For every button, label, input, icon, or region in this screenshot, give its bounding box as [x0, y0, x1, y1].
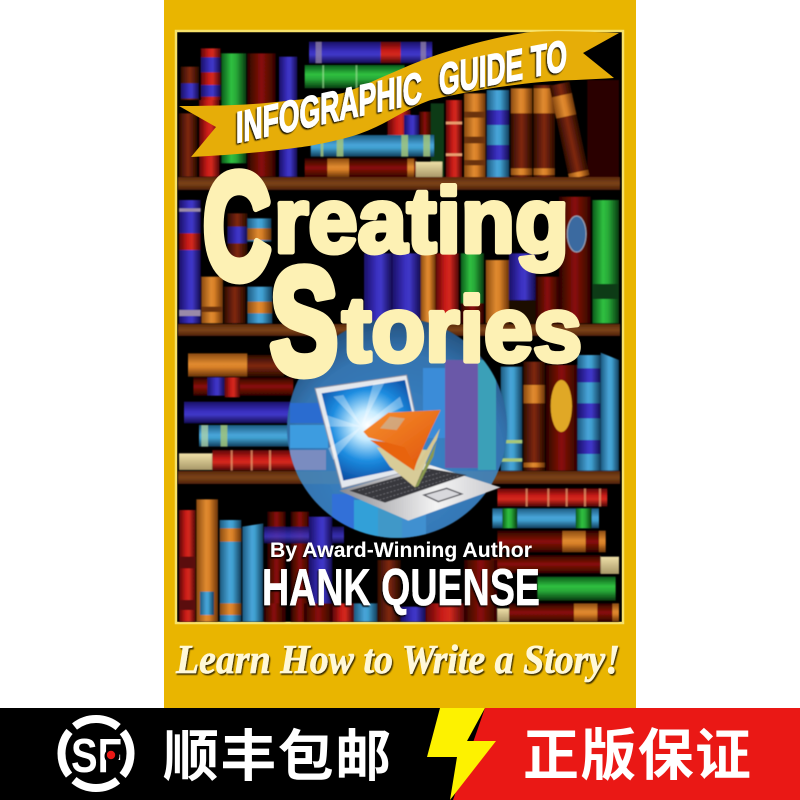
stacked books — [363, 410, 441, 487]
author byline: By Award-Winning Author — [270, 538, 533, 562]
icon: lightning bolt — [427, 708, 496, 800]
banner words: GUIDE TO: GUIDE TO — [439, 31, 567, 105]
ghosted books seen through disc — [290, 360, 504, 545]
author name: HANK QUENSE — [262, 559, 540, 617]
title line: Creating: C — [203, 142, 271, 310]
banner words: INFOGRAPHIC: INFOGRAPHIC — [236, 64, 422, 153]
promo strip: red guarantee band — [453, 708, 800, 800]
blue disc — [287, 318, 507, 538]
shipping label: 顺丰包邮 — [163, 712, 391, 793]
middle shelf row books — [179, 197, 619, 323]
tagline: Learn How to Write a Story! — [175, 636, 620, 682]
icon: SF logo: SF — [71, 730, 122, 783]
title: Creating Stories — [203, 142, 582, 405]
screen rays — [326, 382, 403, 460]
laptop screen — [315, 375, 427, 488]
guarantee label: 正版保证 — [523, 711, 751, 792]
bottom shelf row books — [179, 488, 619, 622]
banner ribbon — [179, 31, 619, 157]
icon: SF logo — [47, 705, 145, 800]
laptop keyboard — [349, 468, 467, 503]
title line: Creating: reating — [274, 170, 569, 272]
laptop base — [339, 465, 501, 521]
top shelf row books — [179, 42, 619, 180]
title line: Creating — [203, 142, 569, 310]
book cover — [164, 0, 636, 708]
bookshelf illustration — [178, 42, 620, 622]
promo strip: black shipping band — [0, 708, 800, 800]
title line: Stories: tories — [342, 279, 582, 381]
wooden shelves — [178, 177, 620, 484]
laptop touchpad — [424, 488, 462, 502]
icon: laptop with books in blue disc — [287, 318, 507, 545]
title line: Stories — [270, 237, 582, 405]
cover frame with bookshelf background — [176, 31, 623, 623]
title line: Stories: S — [270, 237, 338, 405]
banner text — [236, 31, 567, 153]
lower shelf row books — [179, 353, 619, 471]
